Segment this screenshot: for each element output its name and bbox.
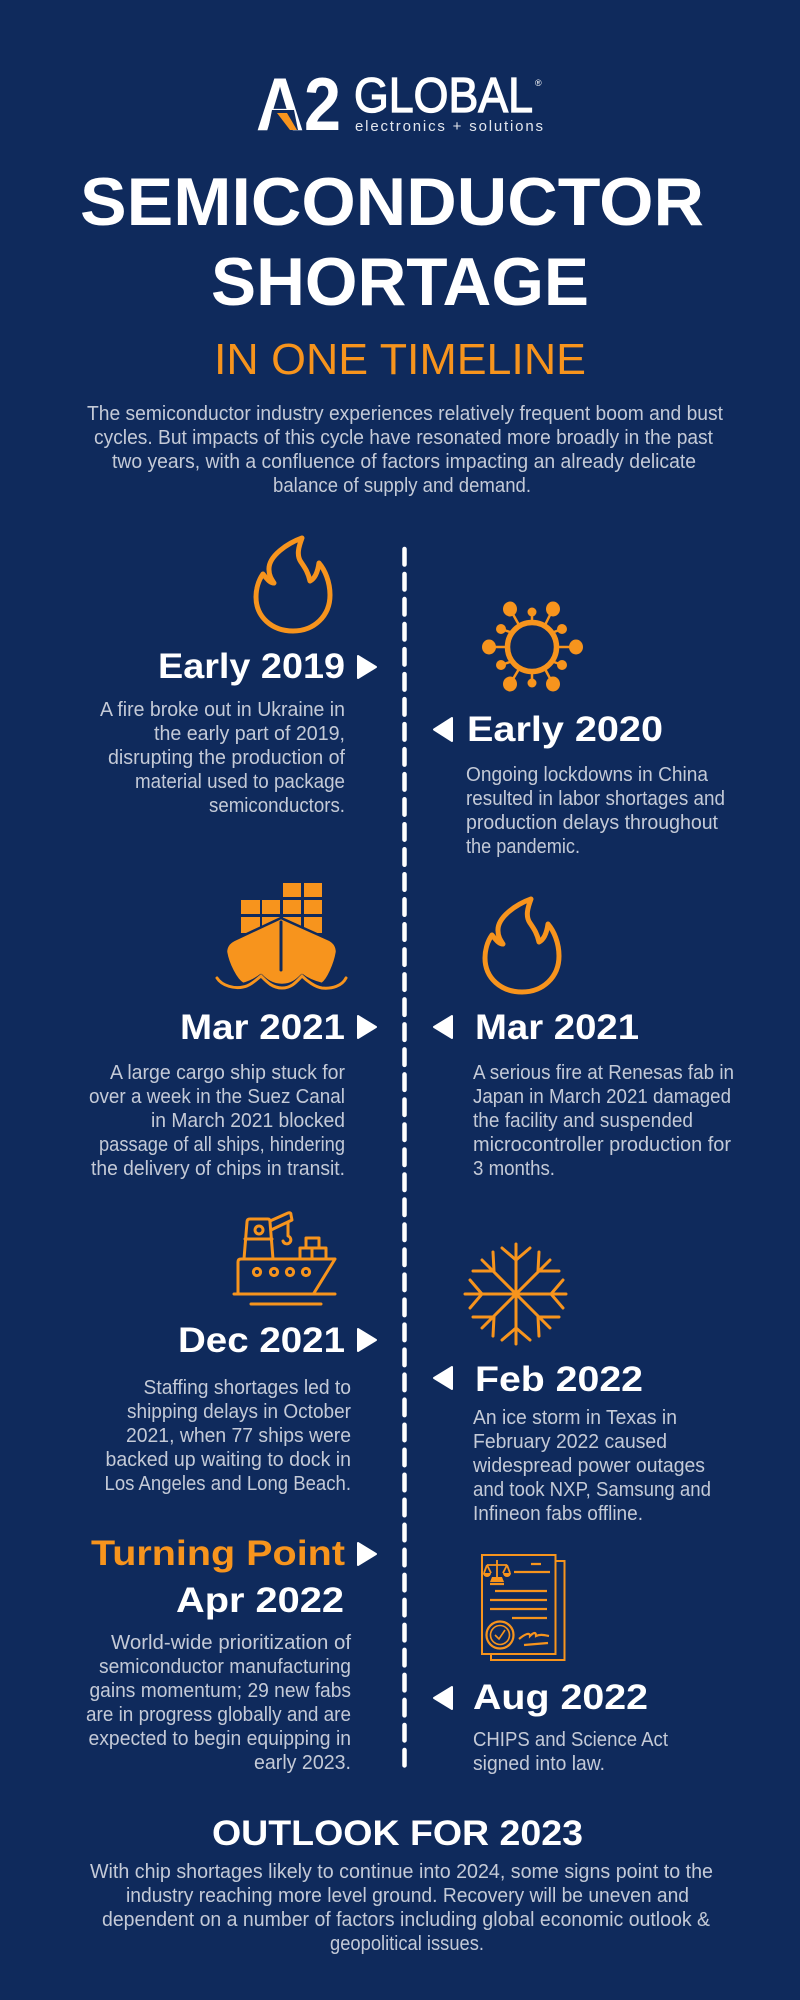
icon: outlined ship — [234, 1213, 335, 1304]
arrow left — [434, 718, 452, 741]
body text: over a week in the Suez Canal — [89, 1086, 345, 1108]
arrow right — [358, 1543, 376, 1565]
heading: Mar 2021: Mar 2021 — [180, 1008, 345, 1047]
panel: Dec 2021 — [104, 1213, 376, 1495]
body text: Japan in March 2021 damaged — [473, 1086, 731, 1108]
body text: are in progress globally and are — [86, 1704, 351, 1726]
title: SHORTAGE — [211, 244, 589, 320]
heading: Feb 2022: Feb 2022 — [475, 1360, 643, 1399]
body text: the pandemic. — [466, 836, 580, 858]
body text: signed into law. — [473, 1753, 605, 1775]
body text — [473, 1062, 734, 1180]
body text — [100, 699, 345, 817]
body text: World-wide prioritization of — [111, 1632, 351, 1654]
panel: Early 2020 — [434, 602, 725, 858]
body text: Staffing shortages led to — [144, 1377, 351, 1399]
arrow right — [358, 1329, 376, 1351]
heading: Turning Point: Turning Point — [91, 1534, 345, 1573]
logo: A2 Global: GLOBAL — [354, 69, 533, 123]
timeline dashed line — [402, 549, 407, 1767]
body text — [472, 1407, 711, 1525]
body text: CHIPS and Science Act — [473, 1729, 668, 1751]
icon: cargo ship — [217, 883, 346, 988]
panel: Mar 2021 Suez — [89, 883, 376, 1180]
body text: disrupting the production of — [108, 747, 345, 769]
intro text: balance of supply and demand. — [273, 475, 531, 497]
body text: Los Angeles and Long Beach. — [104, 1473, 351, 1495]
title — [80, 164, 704, 320]
logo: A2 Global: ® — [535, 78, 542, 88]
body text — [89, 1062, 345, 1180]
icon: flame — [485, 899, 559, 992]
title: SEMICONDUCTOR — [80, 164, 704, 240]
body text: the delivery of chips in transit. — [91, 1158, 345, 1180]
arrow right — [358, 1016, 376, 1038]
heading: Apr 2022: Apr 2022 — [176, 1581, 344, 1620]
body text: the early part of 2019, — [154, 723, 345, 745]
body text: A fire broke out in Ukraine in — [100, 699, 345, 721]
body text — [473, 1729, 668, 1775]
logo: A2 Global: electronics + solutions — [355, 118, 543, 135]
body text: With chip shortages likely to continue into 2024, some signs point to the — [90, 1861, 713, 1883]
body text: dependent on a number of factors including global economic outlook & — [102, 1909, 711, 1931]
body text: shipping delays in October — [127, 1401, 351, 1423]
arrow left — [434, 1016, 452, 1038]
intro text: The semiconductor industry experiences relatively frequent boom and bust — [87, 403, 723, 425]
body text: microcontroller production for — [473, 1134, 731, 1156]
icon: snowflake — [465, 1244, 566, 1344]
heading: Early 2019: Early 2019 — [158, 647, 345, 686]
body text: industry reaching more level ground. Recovery will be uneven and — [126, 1885, 689, 1907]
logo: A2 Global — [256, 62, 543, 146]
icon: flame — [256, 538, 330, 631]
body text: 3 months. — [473, 1158, 555, 1180]
body text: gains momentum; 29 new fabs — [90, 1680, 351, 1702]
heading: Early 2020: Early 2020 — [467, 710, 663, 749]
panel: Aug 2022 — [434, 1555, 668, 1775]
body text: and took NXP, Samsung and — [473, 1479, 711, 1501]
intro text — [87, 403, 723, 497]
body text: 2021, when 77 ships were — [126, 1425, 351, 1447]
body text — [466, 764, 725, 858]
icon: signed document — [482, 1555, 564, 1660]
body text — [86, 1632, 351, 1774]
body text: Ongoing lockdowns in China — [466, 764, 709, 786]
panel: Early 2019 — [100, 538, 376, 817]
intro text: two years, with a confluence of factors impacting an already delicate — [112, 451, 696, 473]
body text: material used to package — [135, 771, 345, 793]
arrow left — [434, 1367, 452, 1389]
body text: backed up waiting to dock in — [106, 1449, 351, 1471]
heading: Aug 2022: Aug 2022 — [473, 1678, 648, 1717]
intro text: cycles. But impacts of this cycle have resonated more broadly in the past — [94, 427, 713, 449]
body text: early 2023. — [254, 1752, 351, 1774]
panel: Turning Point Apr 2022 — [86, 1534, 376, 1774]
logo: A2 Global: A2 — [256, 62, 341, 146]
body text: resulted in labor shortages and — [466, 788, 725, 810]
body text: in March 2021 blocked — [151, 1110, 345, 1132]
arrow left — [434, 1687, 452, 1709]
panel: Mar 2021 Renesas — [434, 899, 734, 1180]
body text: A serious fire at Renesas fab in — [473, 1062, 734, 1084]
subtitle: IN ONE TIMELINE — [214, 336, 586, 384]
panel: Feb 2022 — [434, 1244, 711, 1525]
body text: widespread power outages — [472, 1455, 705, 1477]
body text: production delays throughout — [466, 812, 718, 834]
body text: expected to begin equipping in — [88, 1728, 351, 1750]
body text: semiconductor manufacturing — [99, 1656, 351, 1678]
body text: the facility and suspended — [473, 1110, 693, 1132]
body text — [90, 1861, 713, 1955]
body text: semiconductors. — [209, 795, 345, 817]
body text: geopolitical issues. — [330, 1933, 484, 1955]
body text: Infineon fabs offline. — [473, 1503, 643, 1525]
icon: virus — [482, 602, 583, 692]
panel: outlook — [90, 1814, 713, 1955]
heading: Dec 2021: Dec 2021 — [178, 1321, 345, 1360]
heading: Outlook for 2023: OUTLOOK FOR 2023 — [212, 1814, 583, 1853]
body text: An ice storm in Texas in — [473, 1407, 677, 1429]
body text — [104, 1377, 351, 1495]
body text: A large cargo ship stuck for — [110, 1062, 345, 1084]
arrow right — [358, 656, 376, 678]
body text: February 2022 caused — [473, 1431, 667, 1453]
body text: passage of all ships, hindering — [99, 1134, 345, 1156]
heading: Mar 2021: Mar 2021 — [475, 1008, 639, 1047]
